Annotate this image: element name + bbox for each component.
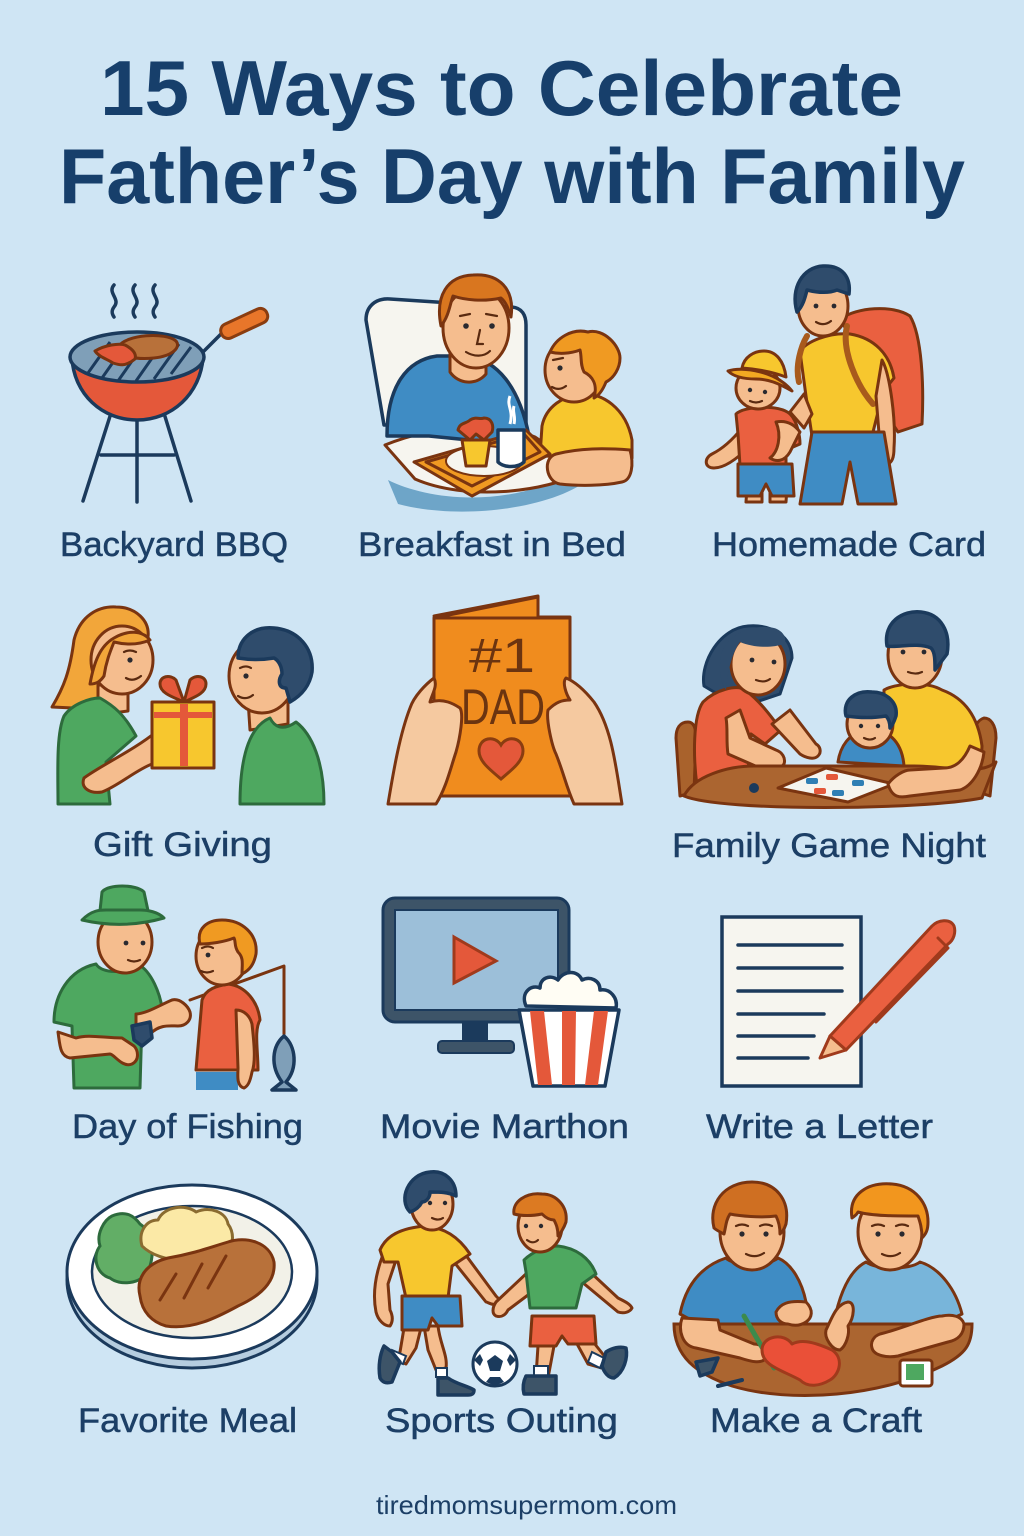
label: Sports Outing: Sports Outing <box>385 1402 618 1440</box>
label: Gift Giving: Gift Giving <box>93 826 272 864</box>
icon: day of fishing <box>54 886 296 1090</box>
title: Father’s Day with Family <box>59 132 965 220</box>
icon: family game night <box>676 612 996 808</box>
label: Favorite Meal: Favorite Meal <box>78 1402 297 1440</box>
label: Make a Craft: Make a Craft <box>710 1402 923 1440</box>
icon: movie marathon <box>383 898 619 1086</box>
label: Movie Marthon: Movie Marthon <box>380 1108 629 1146</box>
icon: homemade card, hikers <box>706 266 923 504</box>
icon: #1 DAD card: DAD <box>461 679 545 735</box>
icon: write a letter <box>722 917 955 1086</box>
icon: #1 DAD card <box>388 596 622 804</box>
label: Backyard BBQ: Backyard BBQ <box>60 526 288 564</box>
label: Homemade Card: Homemade Card <box>712 526 986 564</box>
label: Write a Letter: Write a Letter <box>706 1108 933 1146</box>
icon: #1 DAD card: #1 <box>469 630 535 683</box>
title: 15 Ways to Celebrate <box>100 44 903 132</box>
icon: favorite meal <box>67 1185 317 1368</box>
icon: sports outing <box>374 1172 632 1395</box>
icon: breakfast in bed <box>366 275 632 512</box>
icon: backyard BBQ grill <box>70 285 270 502</box>
icon: gift giving <box>52 607 324 804</box>
label: Breakfast in Bed: Breakfast in Bed <box>358 526 626 564</box>
label: Day of Fishing: Day of Fishing <box>72 1108 303 1146</box>
label: Family Game Night: Family Game Night <box>672 827 987 865</box>
icon: make a craft <box>674 1182 972 1396</box>
footer: website: tiredmomsupermom.com <box>376 1490 677 1520</box>
title <box>59 44 965 220</box>
